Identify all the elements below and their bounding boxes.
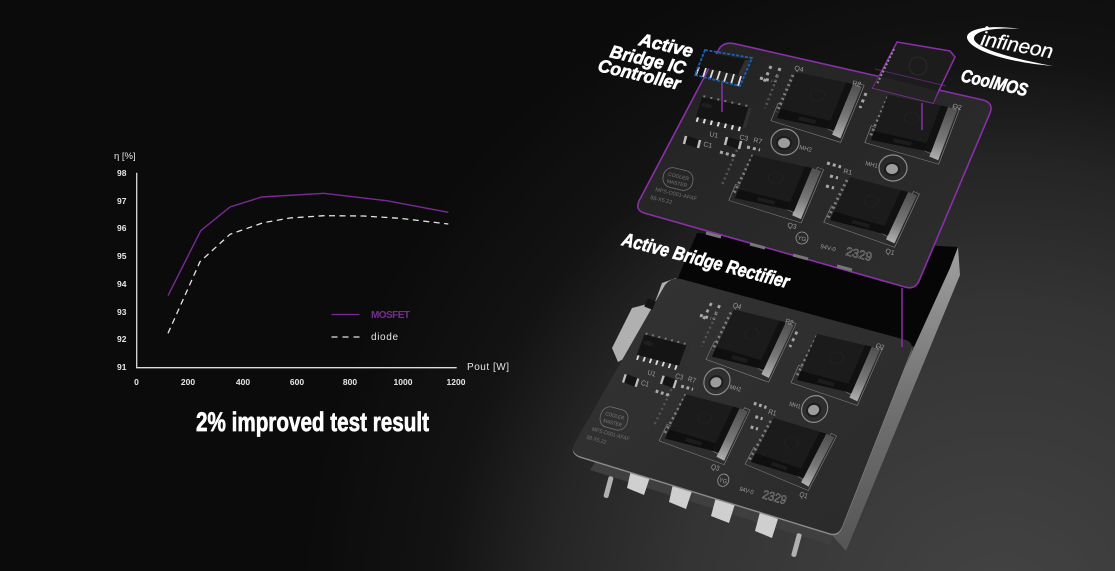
silkscreen reference designators: R2	[852, 80, 862, 89]
upper board components	[650, 65, 962, 264]
transistor Q2	[862, 92, 960, 164]
diode line	[168, 216, 448, 333]
x axis tick labels: 400	[236, 377, 250, 387]
x axis tick labels: 600	[290, 377, 304, 387]
silkscreen reference designators: C1	[640, 380, 650, 389]
silkscreen reference designators: MPS-D001-AFAF	[591, 427, 631, 443]
silkscreen reference designators: 2329	[761, 488, 788, 508]
capacitors	[684, 136, 741, 149]
silkscreen reference designators: C3	[674, 373, 684, 382]
silkscreen reference designators: MPS-D001-AFAF	[655, 187, 698, 203]
x axis tick labels: 1000	[394, 377, 413, 387]
x axis tick labels: 1200	[447, 377, 466, 387]
label: Active Bridge Rectifier: Active Bridge Rectifier	[619, 229, 793, 294]
legend: diode	[371, 332, 398, 343]
YG certification mark	[716, 473, 730, 488]
silkscreen reference designators: R1	[843, 168, 853, 177]
silkscreen reference designators: 94V-0	[820, 244, 837, 254]
y axis tick labels: 97	[117, 196, 127, 206]
transistor Q4	[768, 69, 865, 142]
YG certification mark: YG	[718, 478, 728, 486]
y axis tick labels: 95	[117, 251, 127, 261]
rectifier housing: black block	[677, 233, 958, 347]
connector pins and blocks	[590, 455, 835, 557]
silkscreen reference designators: R7	[687, 376, 697, 385]
mounting hole MH1	[879, 155, 907, 181]
Cooler Master logo: MASTER	[666, 179, 688, 189]
silkscreen reference designators: MH1	[865, 161, 879, 170]
YG certification mark: YG	[797, 236, 807, 243]
silkscreen reference designators: C3	[739, 134, 749, 143]
connector line: controller IC	[721, 83, 723, 112]
y axis tick labels: 93	[117, 307, 127, 317]
x axis tick labels: 200	[181, 377, 195, 387]
pad rows	[661, 312, 819, 462]
x axis tick labels: 800	[343, 377, 357, 387]
Cooler Master logo: COOLER	[667, 172, 690, 182]
silkscreen reference designators: 2329	[844, 244, 874, 264]
silkscreen reference designators: Q1	[798, 491, 809, 501]
capacitors	[623, 298, 684, 388]
silkscreen reference designators: Q2	[875, 343, 885, 352]
rectifier housing: left tab	[612, 278, 676, 362]
YG certification mark	[795, 231, 809, 245]
connector line: CoolMOS chip	[921, 103, 923, 130]
mounting hole MH2	[703, 368, 731, 395]
transistor Q3	[656, 392, 750, 465]
label: Active Bridge IC Controller	[596, 29, 695, 94]
y axis tick labels	[117, 168, 127, 372]
floating CoolMOS chip with purple outline	[873, 42, 955, 103]
headline: test result: 2% improved test result	[196, 407, 429, 437]
Cooler Master logo: MASTER	[602, 418, 623, 429]
x axis tick labels	[134, 377, 466, 387]
silkscreen reference designators: MH1	[788, 402, 801, 411]
silkscreen reference designators: R1	[767, 409, 777, 418]
silkscreen reference designators: Q1	[885, 248, 895, 257]
y axis tick labels: 96	[117, 223, 127, 233]
transistor Q3	[726, 152, 824, 223]
resistors	[720, 78, 841, 188]
silkscreen reference designators: 88-X5.22	[650, 195, 673, 206]
floating controller IC with blue outline	[695, 50, 752, 86]
silkscreen reference designators: U1	[709, 131, 719, 140]
mounting hole MH2	[771, 129, 799, 155]
silkscreen reference designators: 94V-0	[738, 487, 755, 497]
x axis title: Pout [W]	[467, 362, 509, 373]
silkscreen reference designators: Q3	[787, 222, 797, 231]
MOSFET line	[168, 193, 448, 296]
resistors	[652, 315, 775, 429]
silkscreen reference designators	[579, 301, 889, 508]
silkscreen reference designators: MH2	[799, 145, 813, 154]
upper board edge pads	[706, 233, 852, 270]
Cooler Master logo	[598, 405, 630, 432]
legend	[332, 310, 410, 343]
y axis tick labels: 91	[117, 362, 127, 372]
y axis tick labels: 94	[117, 279, 127, 289]
Cooler Master logo	[661, 166, 695, 192]
label: Active Bridge IC Controller: Controller	[596, 55, 683, 94]
y axis title: η [%]	[114, 151, 136, 162]
y axis tick labels: 92	[117, 334, 127, 344]
silkscreen reference designators: R7	[753, 137, 763, 146]
transistor Q4	[703, 307, 796, 382]
silkscreen reference designators: U1	[646, 369, 657, 379]
lower board components	[579, 298, 889, 508]
silkscreen reference designators: Q4	[794, 65, 804, 74]
silkscreen reference designators: C1	[703, 141, 713, 150]
label: Active Bridge IC Controller: Active	[636, 29, 695, 61]
rectifier housing: side wall	[832, 247, 960, 551]
silkscreen reference designators	[650, 65, 962, 264]
pad rows	[733, 75, 888, 220]
silkscreen reference designators: 88-X5.22	[585, 435, 607, 446]
upper board: exploded PCB with purple outline	[638, 43, 991, 288]
silkscreen reference designators: MH2	[729, 385, 742, 394]
axes	[137, 173, 457, 368]
y axis tick labels: 98	[117, 168, 127, 178]
label: CoolMOS: CoolMOS	[959, 65, 1030, 100]
silkscreen reference designators: Q4	[732, 302, 742, 312]
connector line: upper to lower board	[901, 288, 903, 347]
lower board: assembled rectifier PCB	[573, 279, 912, 535]
silkscreen reference designators: Q3	[710, 464, 720, 473]
silkscreen reference designators: R2	[784, 318, 794, 328]
legend: MOSFET	[371, 310, 410, 321]
Cooler Master logo: COOLER	[604, 411, 625, 422]
transistor Q1	[821, 174, 920, 247]
transistor Q2	[788, 331, 883, 405]
transistor Q1	[742, 415, 837, 491]
chart: efficiency vs output power	[114, 151, 509, 387]
controller IC U1	[635, 332, 690, 371]
label: Active Bridge IC Controller: Bridge IC	[608, 41, 689, 78]
logo: Infineon: infineon	[979, 28, 1055, 63]
silkscreen reference designators: Q2	[952, 103, 962, 112]
mounting hole MH1	[800, 396, 829, 422]
x axis tick labels: 0	[134, 377, 139, 387]
controller IC U1	[695, 95, 753, 132]
